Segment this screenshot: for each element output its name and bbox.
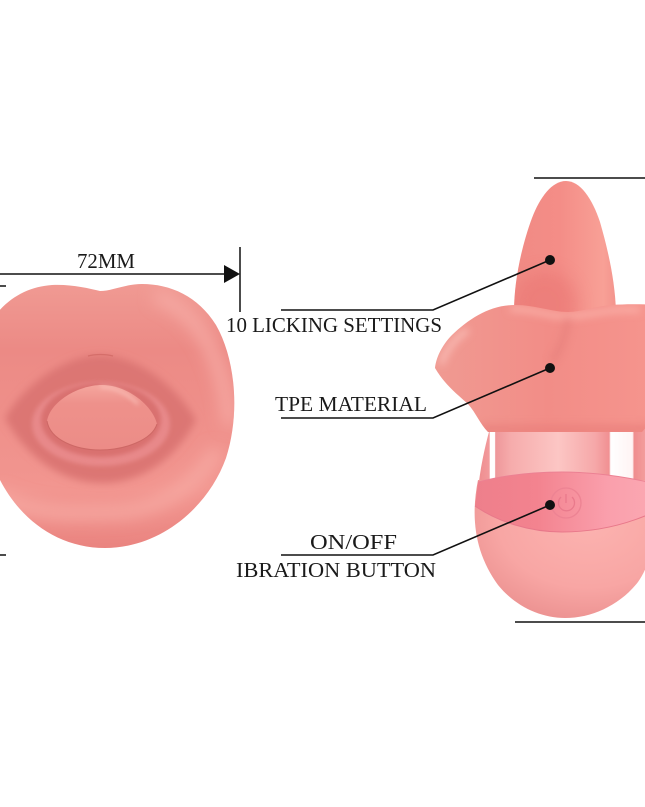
product diagram [0,177,645,623]
tongue [514,181,616,312]
callout: licking settings [226,255,555,337]
callout: TPE material: TPE MATERIAL [275,392,427,416]
callout: on/off vibration button [236,500,555,582]
dimension ticks: device height [515,178,645,622]
front view: mouth [0,284,234,548]
tongue tip [47,385,157,450]
body highlights [441,309,645,436]
callout: on/off vibration button: ON/OFF [310,530,397,554]
dimension: 72MM width: 72MM [77,249,135,273]
lip shading [0,296,230,513]
callout: on/off vibration button: IBRATION BUTTON [236,558,436,582]
inner ring [32,382,170,466]
left tick marks [0,286,6,555]
callout: TPE material [275,363,555,418]
outer lips [0,284,234,548]
upper crease [88,354,113,356]
chrome neck [478,428,645,490]
rounded base [470,480,645,620]
mouth cavity [5,355,196,483]
callout: licking settings: 10 LICKING SETTINGS [226,313,442,337]
button band [475,472,645,532]
lips body [435,304,645,432]
dimension: 72MM width [0,247,240,312]
power button [551,488,581,518]
side view: device [435,178,645,620]
